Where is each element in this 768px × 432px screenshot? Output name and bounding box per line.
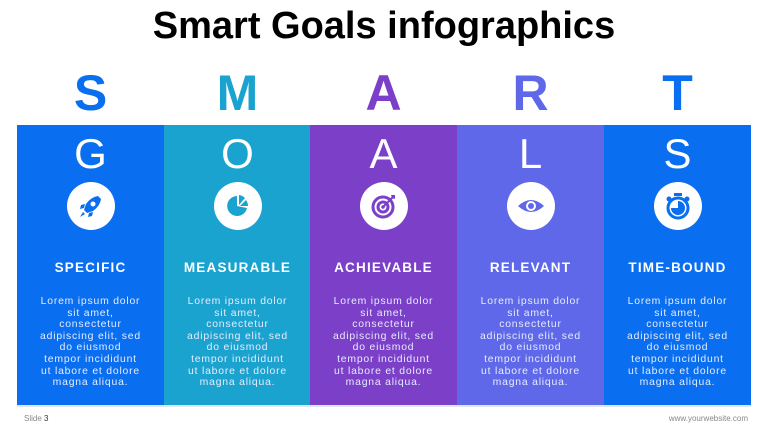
panel: specific: Lorem ipsum dolor	[41, 296, 140, 307]
letters: SMART	[74, 65, 693, 121]
panel: achievable: sit amet,	[360, 308, 407, 319]
icon: pie chart	[214, 182, 262, 230]
panel: relevant: RELEVANT	[490, 260, 571, 275]
panel: specific: consectetur	[59, 319, 122, 330]
icon: target	[360, 182, 408, 230]
panel: measurable: ut labore et dolore	[188, 366, 287, 377]
panel: achievable: ACHIEVABLE	[334, 260, 433, 275]
panel: measurable	[164, 125, 311, 405]
panel: achievable: do eiusmod	[353, 342, 414, 353]
panel: measurable: sit amet,	[214, 308, 261, 319]
panel: time-bound: ut labore et dolore	[628, 366, 727, 377]
panel: measurable: consectetur	[206, 319, 269, 330]
panel: achievable: ut labore et dolore	[334, 366, 433, 377]
panel: time-bound: do eiusmod	[647, 342, 708, 353]
panel: specific: ut labore et dolore	[41, 366, 140, 377]
panel: relevant: Lorem ipsum dolor	[481, 296, 580, 307]
panel: time-bound: consectetur	[646, 319, 709, 330]
panel: achievable: A	[369, 130, 398, 177]
letters: SMART: R	[512, 65, 549, 121]
panel: specific: tempor incididunt	[44, 354, 137, 365]
panel: measurable: adipiscing elit, sed	[187, 331, 288, 342]
panel: relevant	[457, 125, 604, 405]
panel: measurable: MEASURABLE	[184, 260, 291, 275]
icon: stopwatch	[654, 182, 702, 230]
panel: time-bound	[604, 125, 751, 405]
panel: relevant: do eiusmod	[500, 342, 561, 353]
footer: website: www.yourwebsite.com	[669, 414, 748, 423]
panel: specific	[17, 125, 164, 405]
panel: time-bound: sit amet,	[654, 308, 701, 319]
panel: relevant: ut labore et dolore	[481, 366, 580, 377]
letters: SMART: S	[74, 65, 107, 121]
title: Smart Goals infographics	[153, 5, 615, 47]
panel: measurable: magna aliqua.	[200, 377, 275, 388]
panel: relevant: consectetur	[499, 319, 562, 330]
panel: relevant: sit amet,	[507, 308, 554, 319]
panel: measurable: Lorem ipsum dolor	[188, 296, 287, 307]
panel: time-bound: S	[663, 130, 692, 177]
panel: relevant: L	[519, 130, 542, 177]
panel: measurable: tempor incididunt	[191, 354, 284, 365]
panel: specific: adipiscing elit, sed	[40, 331, 141, 342]
panel: achievable: consectetur	[352, 319, 415, 330]
panel: relevant: tempor incididunt	[484, 354, 577, 365]
panel: relevant: adipiscing elit, sed	[480, 331, 581, 342]
panel: time-bound: magna aliqua.	[640, 377, 715, 388]
panel: measurable: O	[221, 130, 254, 177]
panel: achievable: adipiscing elit, sed	[333, 331, 434, 342]
letters: SMART: M	[217, 65, 258, 121]
panel: achievable	[310, 125, 457, 405]
letters: SMART: T	[662, 65, 693, 121]
panel: specific: do eiusmod	[60, 342, 121, 353]
letters: SMART: A	[365, 65, 402, 121]
panel: achievable: tempor incididunt	[337, 354, 430, 365]
panel: specific: magna aliqua.	[53, 377, 128, 388]
panel: achievable: magna aliqua.	[346, 377, 421, 388]
panel: achievable: Lorem ipsum dolor	[334, 296, 433, 307]
icon: rocket	[66, 182, 114, 230]
icon: eye	[506, 182, 554, 230]
panel: time-bound: Lorem ipsum dolor	[628, 296, 727, 307]
panel: time-bound: TIME-BOUND	[628, 260, 727, 275]
footer: slide number: Slide 3	[24, 414, 48, 423]
panel: time-bound: tempor incididunt	[631, 354, 724, 365]
panel: relevant: magna aliqua.	[493, 377, 568, 388]
panel: specific: G	[74, 130, 107, 177]
panel: time-bound: adipiscing elit, sed	[627, 331, 728, 342]
panel: specific: sit amet,	[67, 308, 114, 319]
panel: specific: SPECIFIC	[55, 260, 126, 275]
panel: measurable: do eiusmod	[207, 342, 268, 353]
